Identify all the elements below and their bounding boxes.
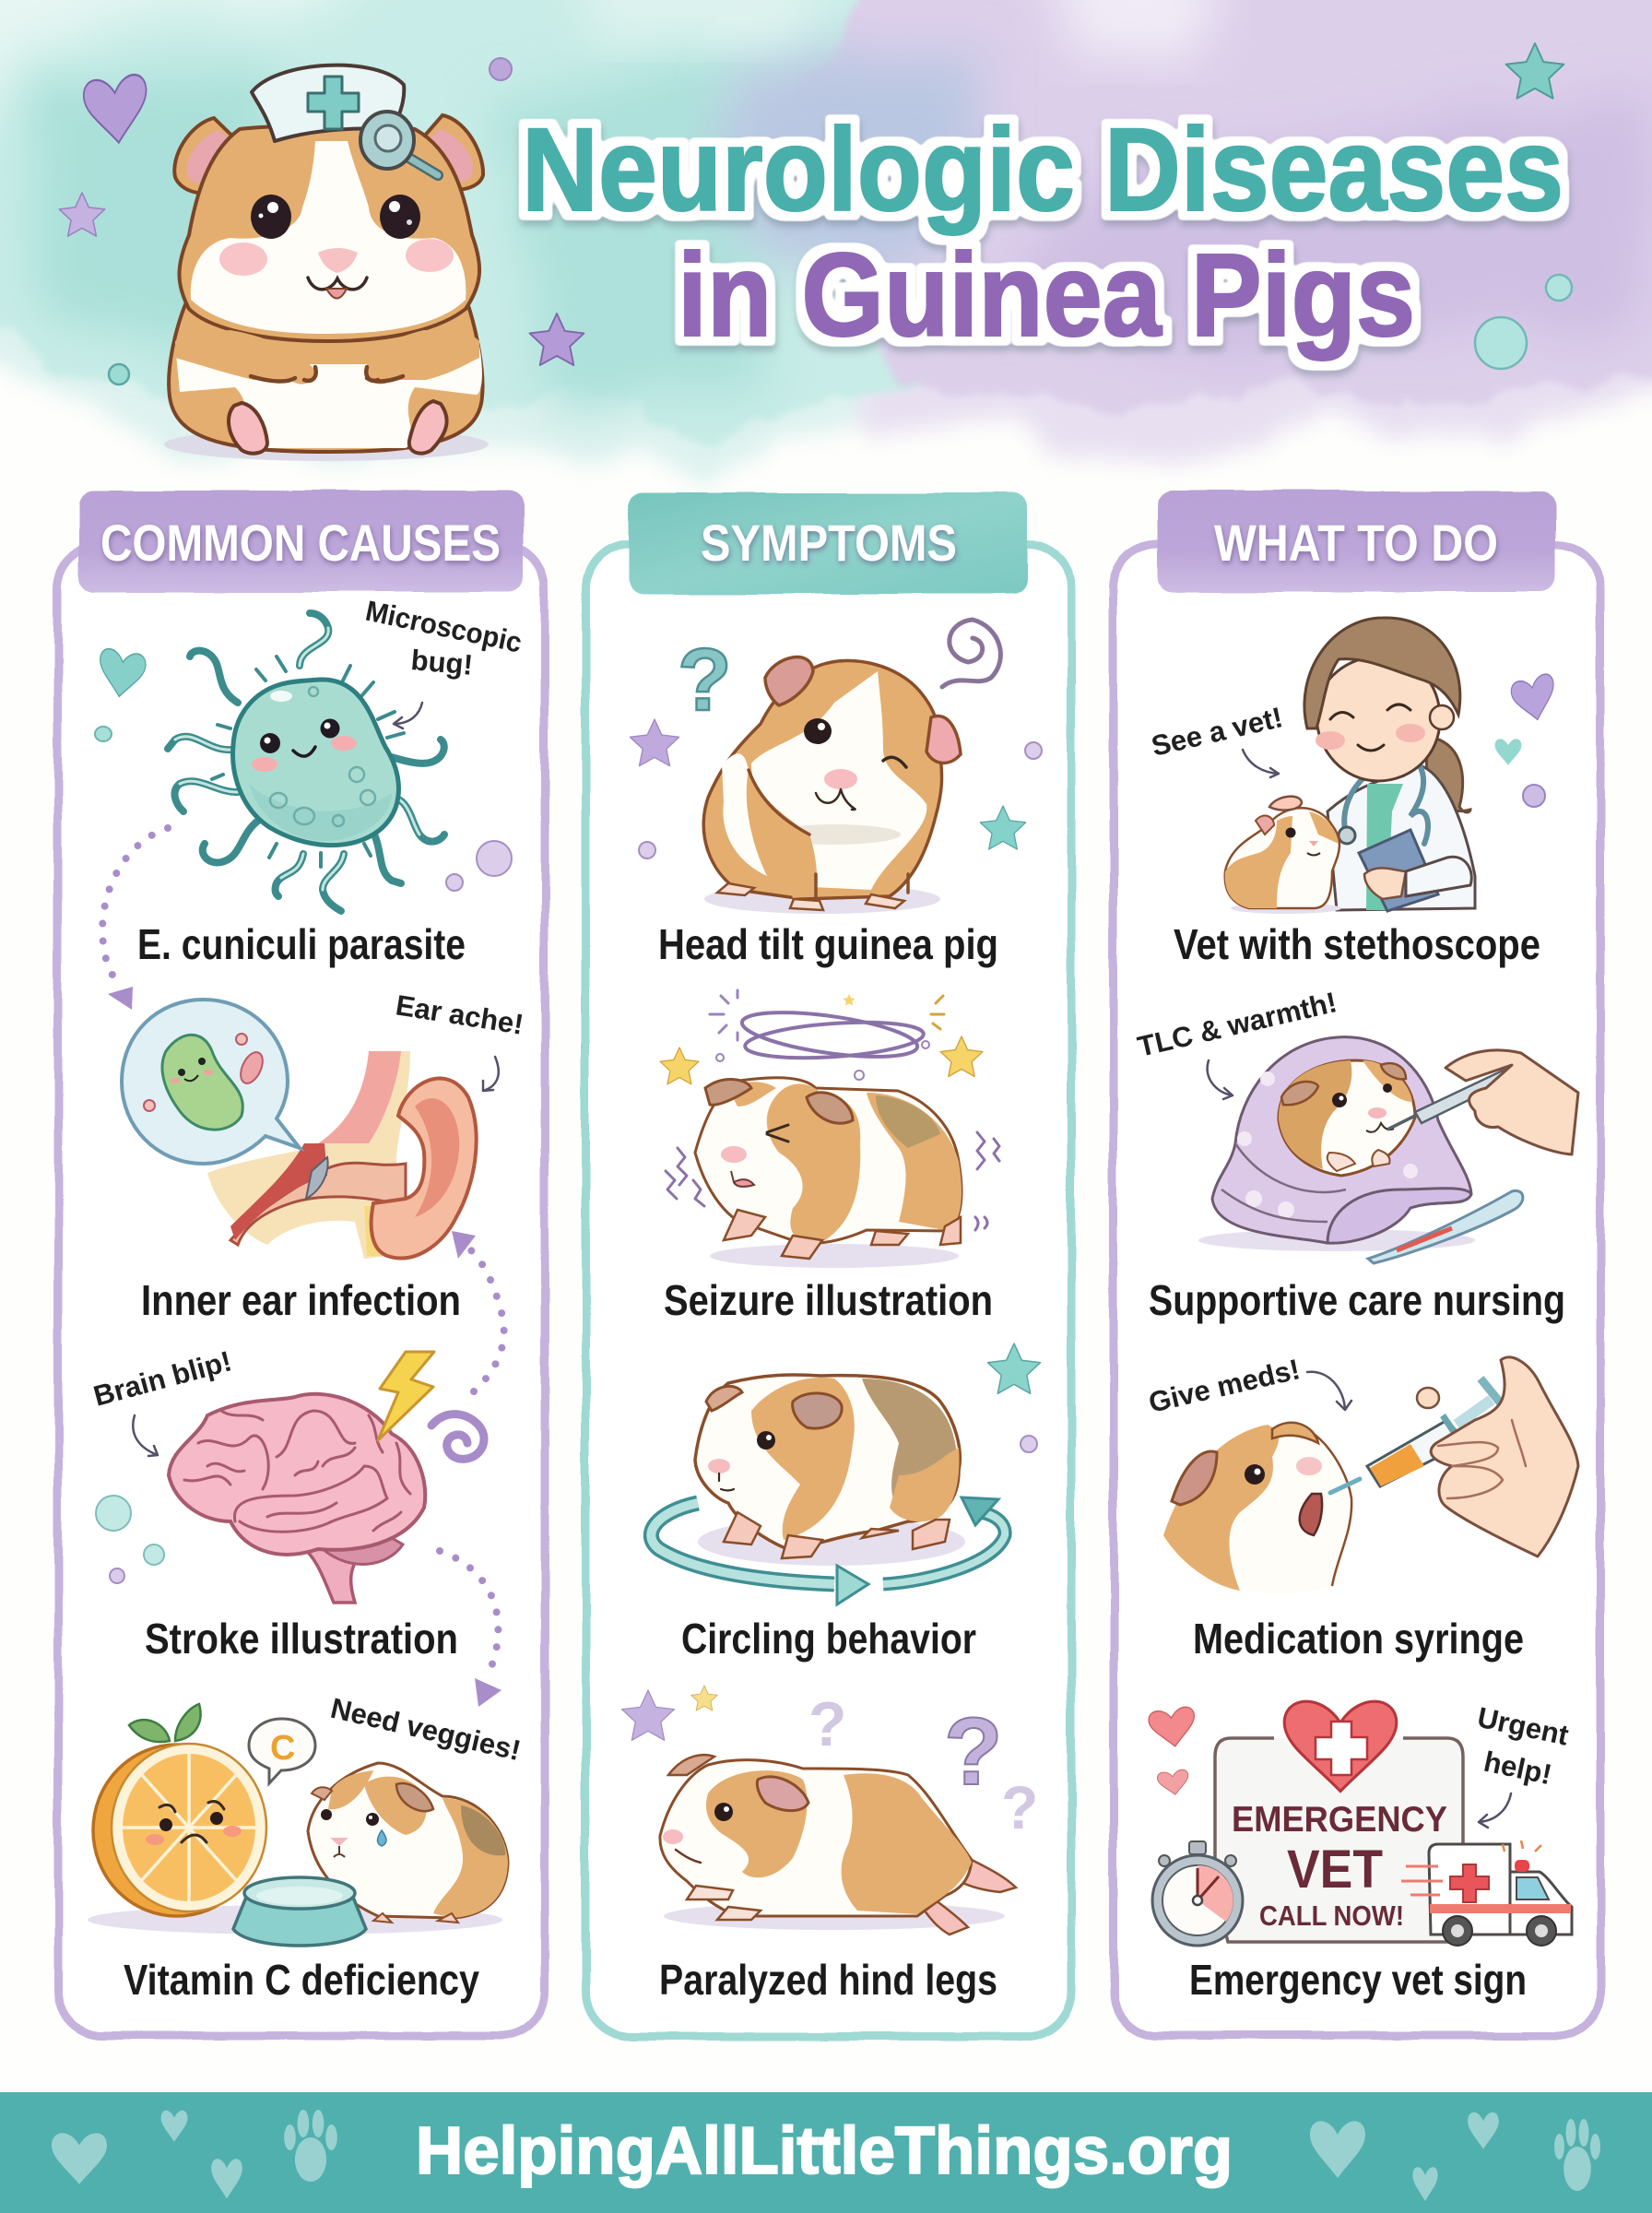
ears (765, 657, 813, 705)
illustration: vitamin C deficiency (88, 1692, 524, 1946)
icon: bubbles (96, 1496, 164, 1583)
icon: question marks: ? (808, 1689, 847, 1759)
blanket (1212, 1037, 1471, 1243)
scrubs (1366, 784, 1403, 910)
callout: urgent help: Urgent (1475, 1701, 1572, 1752)
arrow: circling ribbon right (883, 1512, 1005, 1584)
ears (174, 115, 483, 194)
eyes (251, 195, 420, 239)
illustration: vet with stethoscope (1149, 618, 1559, 914)
orbit rings (739, 1004, 925, 1065)
illustration: stroke brain (90, 1344, 484, 1603)
face (804, 718, 906, 810)
ears (668, 1755, 714, 1775)
icon: purple spiral (431, 1414, 484, 1459)
header decorations (59, 43, 1572, 385)
fur patches (767, 1084, 860, 1241)
callout: brain blip (90, 1344, 235, 1456)
icon: teal bubble large (1475, 317, 1527, 369)
illustration: head tilt guinea pig (630, 620, 1042, 914)
callout: brain blip: Brain blip! (90, 1344, 235, 1413)
ears (705, 1080, 751, 1105)
label: Vet with stethoscope (1174, 920, 1540, 968)
icon: question marks (808, 1689, 1038, 1841)
label: E. cuniculi parasite (137, 920, 466, 968)
bone (207, 1051, 410, 1259)
title (522, 104, 1564, 361)
label: Seizure illustration (664, 1276, 993, 1324)
icon: purple dot (490, 58, 512, 80)
head (179, 125, 479, 341)
face (252, 687, 375, 826)
icon: teal heart (97, 647, 147, 701)
orange slice (112, 1744, 266, 1911)
infection bubble (122, 1000, 300, 1164)
heading: common causes (79, 491, 524, 592)
thumb (1417, 1388, 1439, 1408)
body (695, 1078, 962, 1243)
panel: what to do frame (1114, 544, 1600, 2036)
illustration: emergency vet sign (1148, 1701, 1572, 1946)
icon: stars (621, 1690, 675, 1740)
hand on clipboard (1364, 868, 1406, 899)
ground shadow (704, 884, 940, 914)
mascot: nurse guinea pig (164, 65, 489, 461)
blanket fold (1328, 1189, 1471, 1243)
ears (793, 1393, 842, 1428)
wrapped guinea pig (1279, 1060, 1415, 1176)
sign board (1215, 1738, 1463, 1942)
footer decoration: left hearts and paw (52, 2110, 337, 2198)
callout: give meds: Give meds! (1146, 1353, 1303, 1419)
icon: teal bubble small (1546, 275, 1572, 301)
heading: symptoms (629, 492, 1027, 594)
icon: hearts and dot (1495, 672, 1559, 807)
footer decoration: right hearts and paw (1310, 2112, 1600, 2201)
illustration: paralyzed guinea pig (621, 1686, 1038, 1935)
dropper syringe (1387, 1060, 1512, 1130)
ground shadow (710, 1244, 959, 1268)
hand (1431, 1357, 1578, 1556)
face (1316, 704, 1425, 751)
ground shadow (1198, 1229, 1475, 1251)
thermometer (1368, 1190, 1523, 1263)
front paws (687, 1886, 761, 1920)
outer ear (372, 1079, 477, 1258)
label: Medication syringe (1193, 1615, 1524, 1663)
heading: what to do: WHAT TO DO (1214, 514, 1498, 572)
illustration: medication syringe (1146, 1353, 1578, 1594)
icon: teal dot (109, 364, 129, 385)
callout: need veggies: Need veggies! (327, 1692, 524, 1767)
callout: urgent help (1475, 1701, 1572, 1828)
tremor squiggles (666, 1132, 999, 1230)
cheeks and mouth (219, 239, 454, 299)
callout: microscopic bug: Microscopic (363, 595, 525, 659)
vitamin C bubble: C (270, 1729, 295, 1768)
illustration: seizure guinea pig (660, 990, 999, 1268)
callout: TLC and warmth (1135, 986, 1339, 1099)
white face and chest (751, 671, 926, 890)
icon: purple star (530, 314, 584, 365)
sign text: VET (1287, 1840, 1383, 1899)
callout: ear ache (394, 988, 525, 1091)
label: Paralyzed hind legs (659, 1956, 997, 2004)
fur patches (706, 1770, 807, 1877)
icon: question marks: ? (944, 1698, 1003, 1805)
icon: purple bubbles (446, 841, 512, 891)
body (695, 1375, 960, 1549)
label: Head tilt guinea pig (658, 920, 998, 968)
guinea pig head (1163, 1425, 1351, 1594)
sad guinea pig (308, 1763, 508, 1923)
red heart with cross (1284, 1701, 1397, 1792)
heading: symptoms: SYMPTOMS (701, 514, 957, 572)
label: Circling behavior (681, 1615, 976, 1663)
title: Neurologic Diseases (522, 104, 1564, 236)
sign text: EMERGENCY (1232, 1800, 1447, 1840)
icon: purple dot (1021, 1436, 1037, 1452)
body (660, 1760, 972, 1916)
ground shadow (164, 428, 489, 461)
canal (230, 1163, 406, 1245)
vitamin C bubble (249, 1719, 315, 1783)
callout: urgent help: help! (1481, 1746, 1554, 1791)
otoscope (360, 112, 438, 175)
legs (724, 1210, 961, 1259)
hind legs (922, 1858, 1016, 1935)
illustration: E. cuniculi parasite (95, 595, 525, 911)
face (663, 1803, 733, 1863)
small guinea pig (1225, 797, 1341, 914)
head (1316, 657, 1440, 781)
sad orange face (146, 1802, 242, 1845)
callout: microscopic bug (363, 595, 525, 728)
heading: common causes: COMMON CAUSES (100, 514, 501, 572)
brain stem (300, 1544, 364, 1603)
green bacterium (162, 1035, 242, 1130)
food bowl (233, 1877, 366, 1946)
syringe (1330, 1379, 1501, 1493)
illustration: supportive care nursing (1135, 986, 1578, 1263)
eardrum (306, 1157, 328, 1199)
icon: dizzy spiral (942, 620, 1000, 687)
blanket spots (1237, 1071, 1435, 1225)
heading: what to do (1157, 491, 1556, 592)
fur patches (751, 1378, 855, 1540)
icon: small yellow star (691, 1686, 717, 1710)
ground shadow (698, 1518, 965, 1566)
arms (175, 330, 479, 385)
ponytail (1427, 738, 1470, 812)
panel: symptoms frame (585, 544, 1071, 2036)
callout: microscopic bug: bug! (409, 644, 474, 681)
face (1245, 1457, 1322, 1535)
ground shadow (664, 1902, 1005, 1930)
cell shading (249, 784, 392, 841)
watercolor header wash (0, 0, 1652, 479)
body (703, 661, 942, 899)
lab coat (1328, 765, 1475, 910)
ground shadow (88, 1905, 502, 1935)
lightning bolt (378, 1352, 434, 1440)
panel: common causes frame (58, 544, 545, 2036)
arrow: dotted causes connector 3 (440, 1551, 502, 1707)
legs (749, 770, 817, 898)
callout: see a vet: See a vet! (1149, 701, 1286, 763)
hair (1304, 618, 1460, 728)
icon: question marks: ? (1001, 1773, 1038, 1841)
icon: small hearts (1148, 1706, 1198, 1797)
stars and sparks (660, 990, 983, 1084)
callout: ear ache: Ear ache! (394, 988, 525, 1041)
chest shadow (768, 824, 901, 845)
orange rind (93, 1745, 261, 1916)
icon: purple star small (59, 193, 105, 236)
icon: teal star (1506, 43, 1564, 99)
finger lines (1438, 1420, 1526, 1498)
icon: teal star (988, 1343, 1040, 1393)
arrow: dotted causes connector 1 (102, 828, 168, 1010)
paws (717, 883, 904, 910)
label: Stroke illustration (145, 1615, 458, 1663)
icon: question mark: ? (678, 631, 732, 729)
paws (724, 1512, 950, 1558)
footer website text: HelpingAllLittleThings.org (416, 2114, 1233, 2188)
face (721, 1125, 788, 1187)
tentacles (168, 613, 444, 911)
footer banner (0, 2092, 1652, 2213)
ambulance (1401, 1840, 1572, 1946)
icon: teal bubble (95, 727, 112, 741)
cerebrum (169, 1394, 425, 1555)
leaves (129, 1704, 201, 1742)
illustration: inner ear infection (122, 988, 525, 1259)
feet (229, 401, 447, 454)
illustration: circling guinea pig (651, 1343, 1040, 1604)
label: Vitamin C deficiency (124, 1956, 479, 2004)
stethoscope (1344, 765, 1428, 844)
stopwatch (1152, 1841, 1243, 1946)
body lower (169, 286, 482, 452)
arrow: circling ribbon left (651, 1503, 834, 1584)
label: Inner ear infection (141, 1276, 461, 1324)
face (708, 1431, 775, 1490)
cell body (233, 680, 398, 846)
sign text (1232, 1800, 1447, 1932)
sign text: CALL NOW! (1259, 1899, 1404, 1932)
title: in Guinea Pigs (678, 230, 1415, 361)
hand (1446, 1050, 1578, 1154)
white stripe and muzzle (191, 141, 466, 334)
white belly (175, 346, 482, 448)
icon: purple heart (83, 73, 150, 147)
clipboard (1359, 830, 1438, 911)
label: Supportive care nursing (1149, 1276, 1565, 1324)
icon: stars and dots (630, 719, 1042, 858)
label: Emergency vet sign (1189, 1956, 1527, 2004)
arrow: dotted causes connector 2 (452, 1231, 504, 1391)
nurse cap (252, 65, 404, 141)
callout: TLC and warmth: TLC & warmth! (1135, 986, 1339, 1063)
